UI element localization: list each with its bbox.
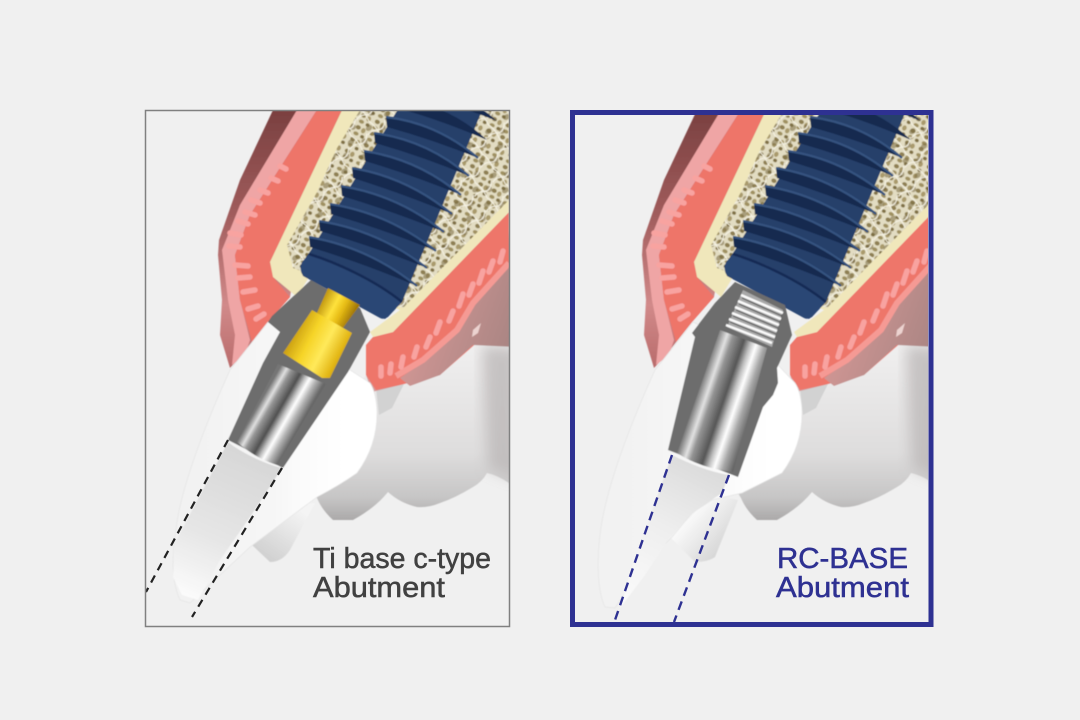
panel border xyxy=(146,110,510,626)
steel cylinder xyxy=(677,330,767,472)
gold screw neck xyxy=(316,288,360,328)
gum tissue xyxy=(218,110,515,392)
panel: RC-BASE abutment xyxy=(572,83,944,624)
titanium base body xyxy=(228,280,370,468)
titanium base crown-side core xyxy=(620,455,729,608)
titanium base body xyxy=(668,282,792,477)
threaded screw section xyxy=(726,290,783,347)
adjacent teeth xyxy=(316,346,509,520)
illustration artwork xyxy=(178,111,509,599)
dashed guide lines xyxy=(146,440,282,617)
label: Ti base c-type Abutment xyxy=(313,543,491,604)
label: RC-BASE Abutment: Abutment xyxy=(776,572,909,604)
lingual tooth shell xyxy=(674,500,737,562)
dashed guide lines xyxy=(615,455,729,622)
adjacent teeth xyxy=(738,346,928,520)
label: RC-BASE Abutment: RC-BASE xyxy=(777,543,908,575)
jaw bone xyxy=(694,110,933,337)
panel border xyxy=(572,112,931,624)
gum tissue xyxy=(642,110,939,392)
gold screw head xyxy=(283,310,352,378)
illustration artwork xyxy=(622,115,928,604)
lingual tooth shell xyxy=(252,524,298,562)
panel: Ti base c-type abutment xyxy=(146,83,520,626)
dental implant xyxy=(724,115,921,320)
titanium base crown-side core xyxy=(173,442,282,600)
crown xyxy=(662,322,802,538)
panel illustration xyxy=(146,83,520,617)
label: RC-BASE Abutment xyxy=(776,543,909,604)
infographic comparison xyxy=(144,110,934,628)
dental implant xyxy=(300,111,497,320)
crown xyxy=(228,321,377,545)
label: Ti base c-type Abutment: Ti base c-type xyxy=(313,543,491,575)
steel cylinder xyxy=(237,364,326,465)
jaw bone xyxy=(270,110,509,337)
panel illustration xyxy=(614,115,928,622)
label: Ti base c-type Abutment: Abutment xyxy=(313,572,445,604)
